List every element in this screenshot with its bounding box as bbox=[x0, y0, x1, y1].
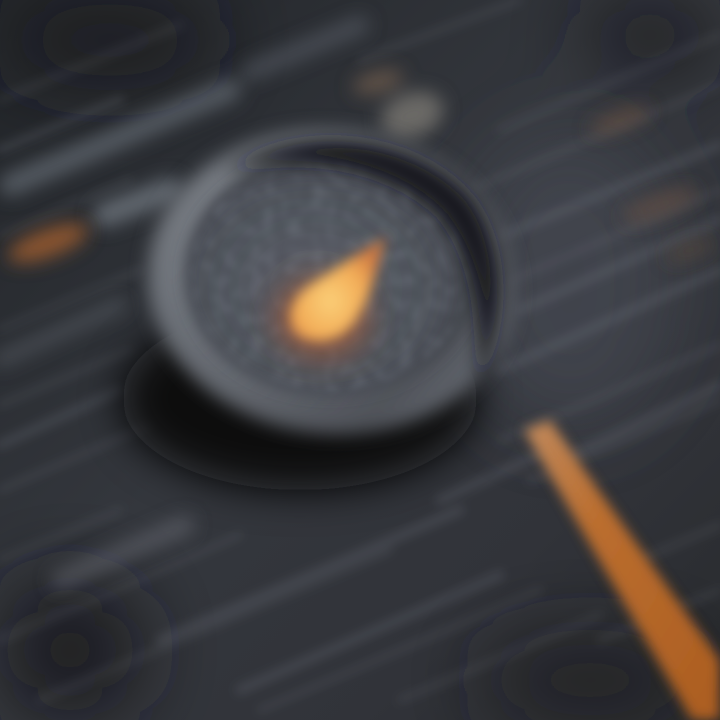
inner dark rim bbox=[225, 141, 497, 385]
lens speckle bbox=[204, 169, 458, 390]
magnifier handle bbox=[524, 420, 720, 720]
background: diagonal light streaks bbox=[0, 25, 360, 580]
flame glow bbox=[274, 276, 370, 360]
magnifying glass bbox=[122, 112, 531, 490]
ring outer frame bbox=[133, 112, 531, 452]
lens glass bbox=[184, 153, 476, 397]
ring cast shadow bbox=[122, 306, 478, 490]
background: orange blurred marks bbox=[4, 65, 717, 271]
flame bbox=[290, 236, 386, 341]
